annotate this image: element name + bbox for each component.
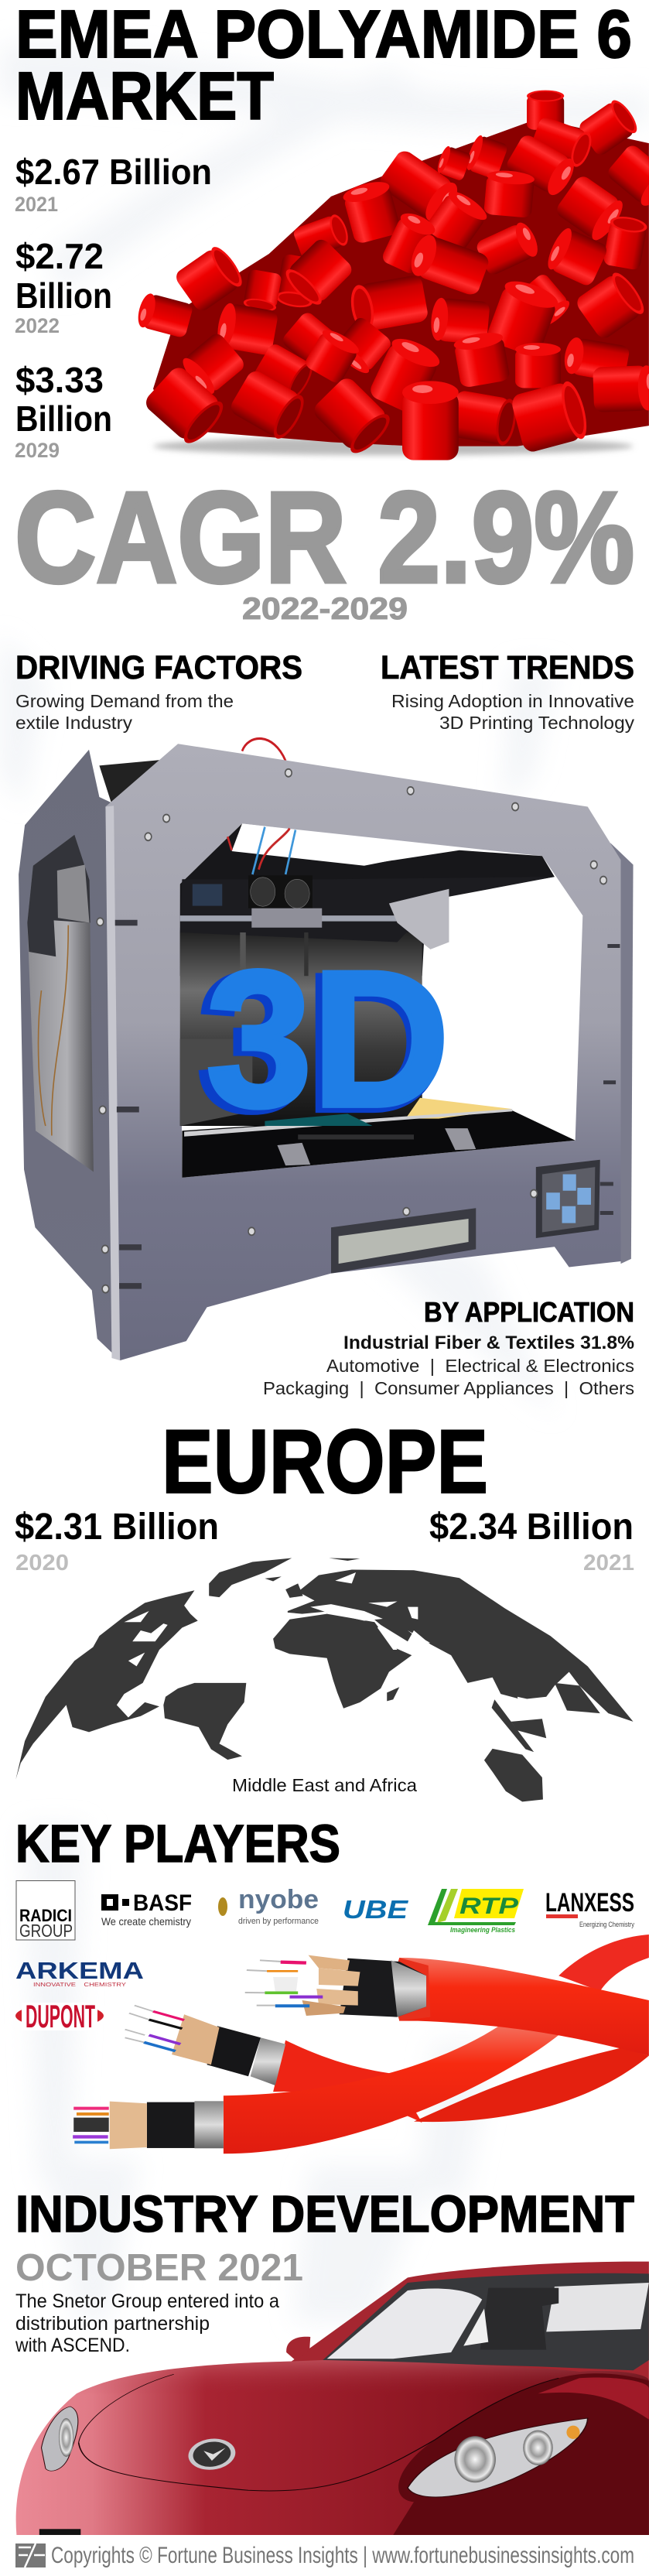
by application (263, 1296, 634, 1398)
by application: Industrial Fiber & Textiles 31.8% (343, 1332, 634, 1353)
Europe values: $2.31 Billion (15, 1507, 219, 1548)
logo: nyobe: driven by performance (238, 1917, 319, 1926)
market stats: 2022 (15, 314, 60, 337)
by application: BY APPLICATION (424, 1296, 634, 1328)
logo: Radici Group: GROUP (19, 1921, 73, 1941)
footer logo icon (15, 2544, 46, 2567)
logo: UBE: UBE (343, 1895, 408, 1924)
logo: Radici Group: RADICI (19, 1906, 72, 1925)
logo: Lanxess: Energizing Chemistry (579, 1921, 634, 1928)
Europe values: 2020 (15, 1551, 69, 1575)
logo: BASF (101, 1890, 192, 1928)
logo: RTP (428, 1889, 524, 1934)
logo: Lanxess (545, 1888, 634, 1928)
by application: Packaging | Consumer Appliances | Others (263, 1378, 634, 1398)
key players heading: KEY PLAYERS (15, 1814, 340, 1873)
market stats: Billion (15, 275, 112, 316)
development description (15, 2290, 279, 2356)
logo: nyobe (218, 1885, 319, 1926)
Europe values (15, 1507, 634, 1575)
CAGR headline: 2022-2029 (242, 592, 408, 626)
market stats: $3.33 (15, 360, 104, 400)
Europe heading: EUROPE (162, 1411, 488, 1512)
latest trends (381, 649, 635, 733)
title: MARKET (15, 59, 274, 134)
market stats: Billion (15, 399, 112, 439)
driving factors: Growing Demand from the (15, 691, 234, 711)
driving factors (15, 649, 302, 733)
driving factors: DRIVING FACTORS (15, 649, 302, 686)
market stats: 2029 (15, 439, 60, 462)
3D printer illustration: 3D (198, 935, 446, 1151)
latest trends: LATEST TRENDS (381, 649, 634, 686)
map label: Middle East and Africa (232, 1775, 417, 1795)
development description: The Snetor Group entered into a (15, 2290, 279, 2312)
cable illustration (73, 1935, 649, 2154)
logo: DuPont (15, 1998, 104, 2034)
Europe values: 2021 (583, 1551, 634, 1575)
market stats: 2021 (15, 193, 58, 216)
by application: Automotive | Electrical & Electronics (326, 1356, 634, 1376)
logo: Radici Group (16, 1880, 75, 1941)
Europe values: $2.34 Billion (429, 1507, 634, 1548)
3D printer illustration: 3D (206, 931, 449, 1147)
logo: DuPont: DUPONT (26, 1998, 95, 2034)
logo: RTP: Imagineering Plastics (450, 1926, 515, 1934)
market stats: $2.72 (15, 236, 104, 276)
logo: RTP: RTP (459, 1894, 519, 1919)
car illustration (16, 2262, 649, 2535)
logo: nyobe: nyobe (238, 1885, 319, 1914)
latest trends: Rising Adoption in Innovative (391, 691, 634, 711)
logo: Arkema: ARKEMA (15, 1957, 144, 1984)
market stats: $2.67 Billion (15, 152, 212, 192)
development description: with ASCEND. (15, 2335, 130, 2356)
pellets illustration (135, 91, 649, 460)
title (15, 0, 632, 134)
logo: BASF: We create chemistry (101, 1915, 191, 1928)
logo: Arkema: INNOVATIVE CHEMISTRY (33, 1982, 126, 1988)
latest trends: 3D Printing Technology (439, 713, 635, 733)
market stats (15, 152, 212, 462)
development description: distribution partnership (15, 2313, 210, 2335)
logo: BASF: BASF (133, 1890, 192, 1916)
driving factors: extile Industry (15, 713, 133, 733)
3D printer illustration (19, 738, 634, 1360)
development date: OCTOBER 2021 (15, 2247, 303, 2289)
world map (15, 1558, 634, 1801)
